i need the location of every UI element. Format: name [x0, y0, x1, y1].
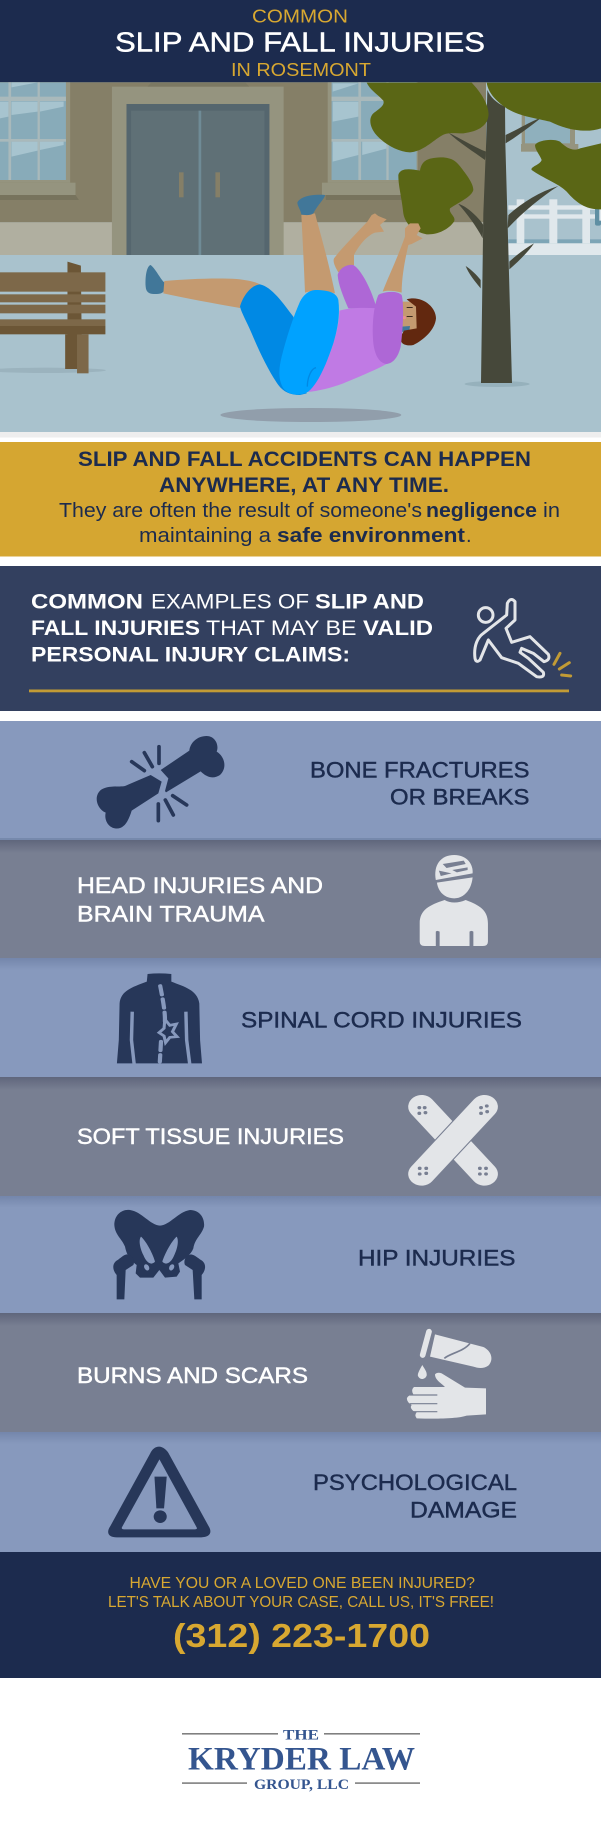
panel: bone fractures [0, 721, 601, 840]
label: psychological damage: PSYCHOLOGICAL [313, 1470, 517, 1495]
panel heading: FALL INJURIES [31, 617, 200, 640]
icon: spine back [117, 973, 202, 1064]
illustration: person slipping in front of a building [0, 82, 601, 432]
heading: common: COMMON [252, 6, 348, 27]
label: psychological damage: DAMAGE [410, 1498, 517, 1523]
label: soft tissue: SOFT TISSUE INJURIES [77, 1124, 344, 1149]
shadow under tree [465, 381, 530, 387]
logo: the kryder law group: GROUP, LLC [254, 1777, 349, 1793]
icon: falling person outline [475, 600, 571, 677]
panel: gold intro [0, 442, 601, 556]
icon: bandaged head [420, 855, 488, 946]
intro text: negligence [426, 500, 537, 522]
panel: hip injuries [0, 1196, 601, 1313]
label: bone fractures [310, 758, 530, 810]
call to action text [108, 1575, 494, 1611]
panel heading [31, 590, 433, 667]
label: psychological damage [313, 1470, 517, 1523]
phone number: (312) 223-1700 [173, 1617, 430, 1654]
panel: call to action [0, 1552, 601, 1678]
heading: slip and fall injuries: SLIP AND FALL INJURIES [115, 27, 485, 58]
intro text: . [466, 525, 472, 547]
call to action text: LET'S TALK ABOUT YOUR CASE, CALL US, IT'S FREE! [108, 1594, 494, 1611]
panel: common examples [0, 566, 601, 711]
logo: the kryder law group: THE [283, 1727, 319, 1743]
label: head injuries [77, 873, 323, 927]
label: bone fractures: BONE FRACTURES [310, 758, 530, 783]
intro text: safe environment [277, 525, 465, 547]
panel: burns and scars [0, 1313, 601, 1432]
label: burns and scars: BURNS AND SCARS [77, 1363, 308, 1388]
icon: chemical burn [407, 1332, 491, 1419]
panel heading: PERSONAL INJURY CLAIMS: [31, 644, 350, 667]
panel heading: COMMON [31, 590, 143, 613]
heading: in rosemont: IN ROSEMONT [231, 59, 371, 80]
intro heading: ANYWHERE, AT ANY TIME. [159, 474, 449, 497]
background window, fence and tree [367, 83, 601, 383]
door [112, 82, 284, 255]
panel: spinal cord [0, 958, 601, 1077]
intro heading [78, 448, 531, 497]
panel heading: EXAMPLES OF [151, 590, 309, 613]
label: bone fractures: OR BREAKS [390, 785, 530, 810]
panel: head injuries [0, 840, 601, 958]
right window [322, 82, 422, 200]
label: head injuries: BRAIN TRAUMA [77, 902, 265, 927]
icon: pelvis [113, 1210, 205, 1299]
title banner [0, 0, 601, 82]
intro heading: SLIP AND FALL ACCIDENTS CAN HAPPEN [78, 448, 531, 471]
white stripe under illustration [0, 432, 601, 438]
intro text: They are often the result of someone's [59, 500, 422, 522]
label: head injuries: HEAD INJURIES AND [77, 873, 323, 898]
intro text: maintaining a [139, 525, 272, 547]
label: hip injuries: HIP INJURIES [358, 1246, 516, 1271]
call to action text: HAVE YOU OR A LOVED ONE BEEN INJURED? [130, 1575, 475, 1592]
panel: psychological damage [0, 1432, 601, 1552]
panel heading: SLIP AND [315, 590, 424, 613]
intro text [59, 500, 560, 547]
bench [0, 262, 106, 373]
icon: warning triangle [108, 1447, 210, 1537]
left window [0, 82, 79, 200]
shadow under person [220, 408, 401, 422]
icon: crossed bandages [417, 1104, 489, 1176]
panel heading: THAT MAY BE [206, 617, 356, 640]
label: spinal cord: SPINAL CORD INJURIES [241, 1008, 522, 1033]
intro text: in [543, 500, 560, 522]
logo: the kryder law group: KRYDER LAW [188, 1741, 415, 1777]
falling person [146, 195, 436, 395]
logo: the kryder law group [182, 1727, 420, 1793]
icon: broken bone [97, 736, 224, 828]
panel heading: VALID [363, 617, 433, 640]
panel: soft tissue [0, 1077, 601, 1196]
building and ground [0, 82, 601, 432]
